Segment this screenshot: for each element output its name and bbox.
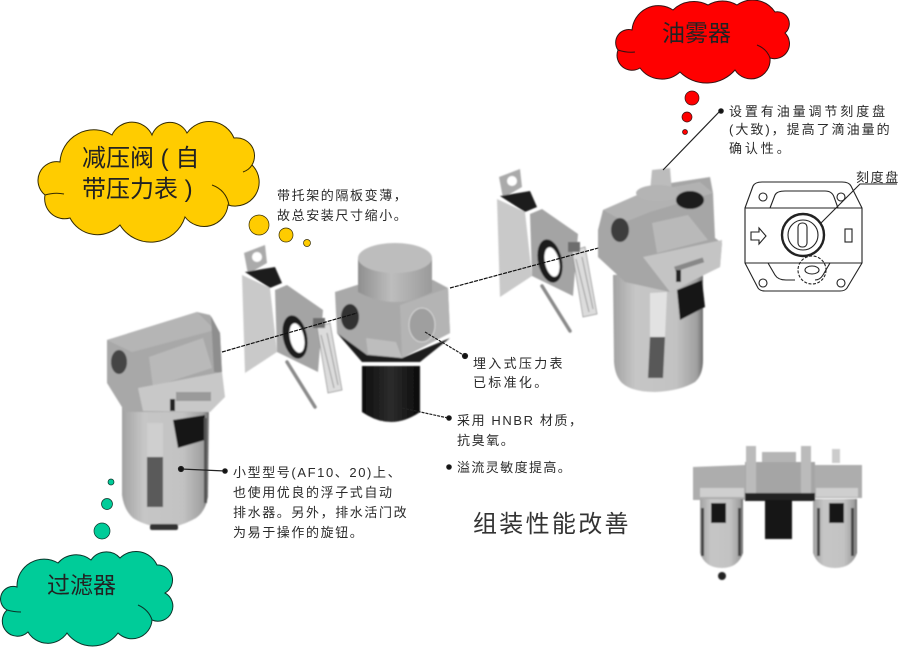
dial diagram xyxy=(745,182,897,291)
connection lines xyxy=(222,240,628,352)
caption: filter: 排水器。另外，排水活门改 xyxy=(233,505,408,520)
caption: dial xyxy=(729,104,892,156)
cloud: lubricator xyxy=(616,0,789,83)
filter unit photo xyxy=(107,312,225,530)
cloud: filter xyxy=(1,551,173,646)
mounting bracket 2 xyxy=(497,169,597,331)
caption: overflow: 溢流灵敏度提高。 xyxy=(457,460,572,475)
bubbles: filter xyxy=(94,479,114,539)
caption: pressure gauge xyxy=(473,356,565,390)
caption: dial: 确认性。 xyxy=(729,141,793,156)
regulator unit photo xyxy=(335,243,450,422)
caption: HNBR: 采用 HNBR 材质， xyxy=(457,413,584,428)
caption: dial: (大致)，提高了滴油量的 xyxy=(729,122,892,137)
mounting bracket 1 xyxy=(242,245,342,407)
cloud: regulator xyxy=(38,121,259,242)
caption: pressure gauge: 埋入式压力表 xyxy=(473,356,565,371)
small assembled unit photo xyxy=(693,446,862,580)
caption: separator plate: 带托架的隔板变薄， xyxy=(277,188,408,203)
cloud: filter: 过滤器 xyxy=(47,572,116,598)
caption: filter: 为易于操作的旋钮。 xyxy=(233,525,364,540)
caption: dial: 设置有油量调节刻度盘 xyxy=(729,104,888,119)
cloud: regulator: 减压阀 ( 自 xyxy=(82,145,199,172)
label: dial: 刻度盘 xyxy=(856,170,900,185)
caption: HNBR xyxy=(457,413,584,448)
lubricator unit photo xyxy=(598,168,722,392)
caption: HNBR: 抗臭氧。 xyxy=(457,433,515,448)
caption: pressure gauge: 已标准化。 xyxy=(473,375,550,390)
bubbles: regulator xyxy=(249,215,310,246)
caption: filter xyxy=(233,465,408,540)
callout leaders xyxy=(178,109,723,473)
cloud: regulator: 带压力表 ) xyxy=(82,176,193,203)
heading: assembly improved: 组装性能改善 xyxy=(473,511,631,538)
caption: filter: 小型型号(AF10、20)上、 xyxy=(233,465,402,480)
cloud: lubricator: 油雾器 xyxy=(662,20,731,46)
caption: filter: 也使用优良的浮子式自动 xyxy=(233,485,394,500)
bubbles: lubricator xyxy=(682,91,699,134)
caption: separator plate xyxy=(277,188,408,223)
caption: separator plate: 故总安装尺寸缩小。 xyxy=(277,208,408,223)
